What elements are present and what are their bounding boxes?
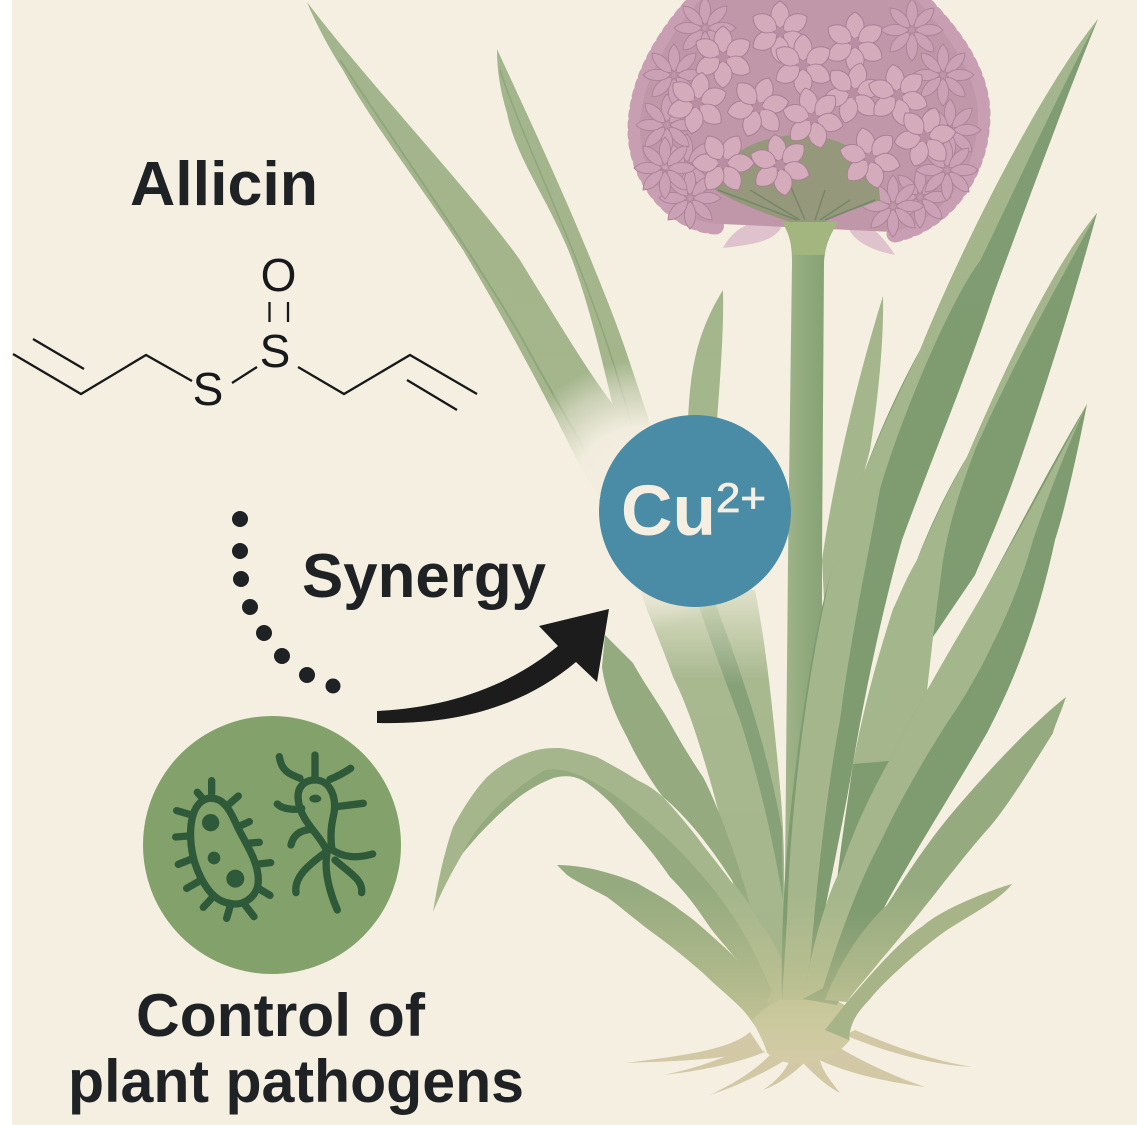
bonds	[13, 302, 477, 410]
roots	[625, 1030, 972, 1095]
lower right leaf	[825, 697, 1066, 1002]
narrow upper-left leaf	[497, 49, 660, 470]
mid right leaf	[803, 404, 1087, 1005]
long left leaf	[307, 2, 650, 500]
fringe	[636, 0, 982, 234]
flower head	[634, 0, 982, 255]
caption: Control of plant pathogens: plant pathogens	[68, 1048, 524, 1115]
atom S lower: S	[193, 363, 223, 415]
allicin molecule	[13, 249, 477, 415]
small leaf by the copper ion	[688, 290, 723, 420]
receptacle ribs	[718, 185, 875, 220]
outer florets	[656, 134, 718, 196]
short mid-left leaf	[602, 635, 750, 905]
atom O: O	[261, 249, 296, 301]
copper ion circle	[599, 415, 791, 607]
low left leaf	[557, 865, 775, 1033]
leaf bundle base	[752, 994, 855, 1064]
flower mass	[640, 0, 978, 232]
inner florets	[692, 26, 754, 88]
left white margin	[0, 0, 12, 1125]
flower stem	[782, 222, 838, 985]
green receptacle	[715, 135, 880, 222]
bacteria icons	[176, 755, 373, 918]
tallest right leaf	[782, 19, 1098, 1000]
bacterium	[176, 781, 271, 918]
dotted path	[232, 511, 340, 694]
Cu label: Cu	[621, 472, 716, 551]
charge: 2+	[716, 474, 766, 521]
caption: Control of plant pathogens: Control of	[136, 982, 426, 1049]
stem collar	[782, 222, 838, 255]
bottom right leaf	[825, 884, 1012, 1040]
label: Synergy: Synergy	[302, 542, 547, 611]
small central leaf	[822, 296, 883, 620]
title: Allicin: Allicin	[130, 150, 318, 219]
arching left leaf	[433, 748, 797, 1015]
curved arrow	[377, 609, 609, 723]
back right leaf	[830, 213, 1097, 960]
fan leaf below copper ion	[640, 590, 784, 1000]
pathogen circle	[143, 716, 401, 974]
atom S upper: S	[260, 325, 290, 377]
pale bracts	[723, 222, 895, 255]
fade behind copper ion	[505, 360, 775, 630]
fungus	[277, 755, 373, 910]
caption: Control of plant pathogens	[68, 982, 524, 1115]
